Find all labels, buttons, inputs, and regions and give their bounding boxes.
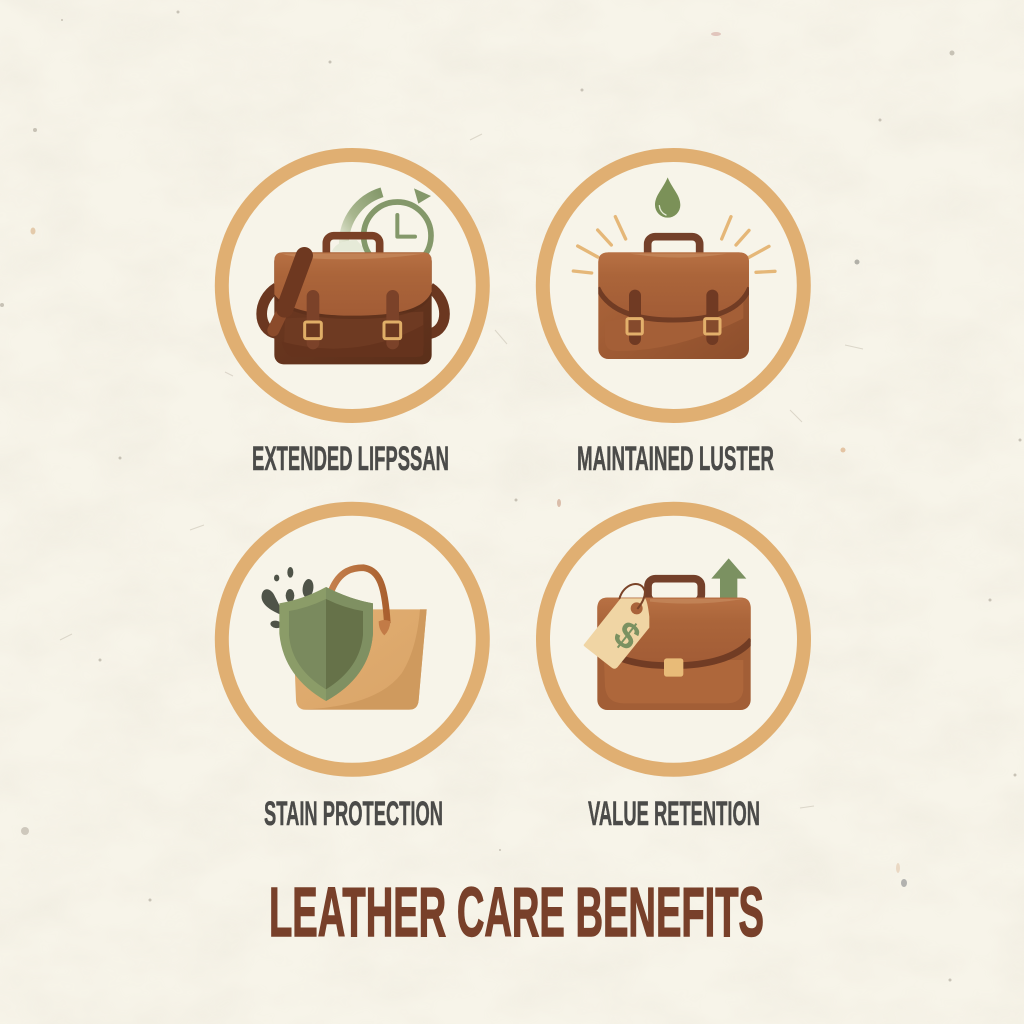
bag body (597, 598, 751, 710)
shine rays (573, 217, 775, 273)
handle tab (379, 620, 390, 635)
label: maintained luster: MAINTAINED LUSTER (577, 440, 774, 478)
ring 4 (543, 509, 804, 770)
icon: oil drop (655, 177, 680, 218)
label: stain protection: STAIN PROTECTION (264, 795, 443, 833)
icon: messenger bag with clock (262, 188, 444, 364)
icon: price tag: $ (606, 612, 649, 658)
icon: renewal arc (344, 192, 382, 245)
icon: up arrow (711, 558, 746, 599)
panel: maintained luster (543, 155, 804, 416)
tote body (292, 609, 427, 710)
bag body (274, 252, 432, 364)
stain splashes (262, 567, 315, 629)
straps and buckles (307, 290, 319, 349)
label: extended lifespan: EXTENDED LIFPSSAN (252, 440, 449, 478)
side handles (262, 288, 444, 334)
ring 1 (222, 155, 483, 416)
bag body (598, 252, 749, 359)
icon: shiny briefcase with drop (573, 177, 775, 359)
straps and buckles (629, 290, 641, 345)
icon: tote bag with shield (262, 567, 427, 710)
bag handle (648, 579, 701, 602)
bag handle (648, 237, 700, 260)
icon: price tag (584, 584, 649, 669)
bag handle (326, 236, 380, 259)
panel: stain protection (222, 509, 483, 770)
shoulder strap (273, 315, 281, 330)
tote handle (332, 568, 387, 623)
flap seam (617, 640, 752, 666)
icon: briefcase with price tag (584, 558, 752, 710)
bag flap (274, 252, 432, 319)
clasp (664, 658, 683, 677)
icon: clock (364, 188, 431, 269)
panel: extended lifespan (222, 155, 483, 416)
ring 3 (222, 509, 483, 770)
ring 2 (543, 155, 804, 416)
flap seam (598, 288, 750, 320)
panel: value retention (543, 509, 804, 770)
label: value retention: VALUE RETENTION (588, 795, 760, 833)
icon: shield (279, 587, 373, 701)
